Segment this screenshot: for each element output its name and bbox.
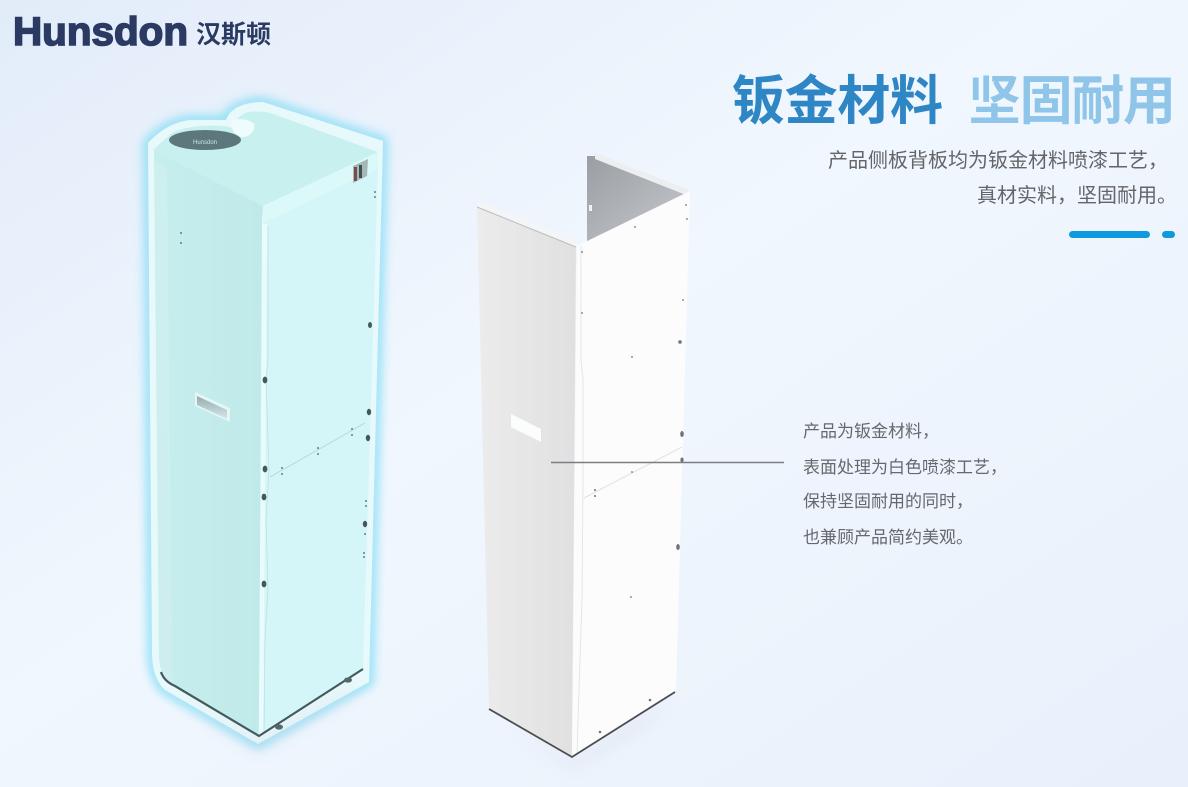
panel seam	[261, 224, 265, 736]
subtitle text: 真材实料，坚固耐用。	[977, 184, 1177, 207]
callout text: 也兼顾产品简约美观。	[803, 528, 973, 547]
title: 钣金材料	[732, 72, 943, 131]
seam dashes	[584, 447, 682, 498]
back top lip	[595, 153, 689, 195]
left side panel	[477, 206, 576, 757]
white outline	[148, 102, 383, 744]
panel seam	[577, 246, 583, 754]
title: 坚固耐用	[968, 72, 1176, 131]
base line	[161, 669, 363, 736]
holes	[581, 204, 688, 733]
left face inner strip	[155, 160, 172, 684]
handle slot	[195, 392, 230, 422]
left face	[154, 150, 263, 736]
mounting holes	[180, 191, 376, 587]
accent bars	[1069, 231, 1175, 238]
right face	[259, 168, 378, 736]
callout text: 保持坚固耐用的同时，	[803, 492, 973, 511]
side panel step	[158, 432, 172, 684]
left top lip	[477, 202, 578, 247]
inner back panel	[587, 156, 686, 243]
callout leader line	[551, 462, 784, 464]
inner slot	[589, 205, 592, 211]
title	[732, 72, 1176, 131]
control dial: Hunsdon	[193, 140, 217, 146]
front panel	[572, 191, 690, 757]
callout text: 产品为钣金材料，	[803, 422, 939, 441]
floor shadow	[170, 682, 362, 752]
glow halo	[148, 102, 383, 744]
lip shadow	[477, 207, 576, 247]
subtitle text	[828, 149, 1177, 207]
floor shadow	[495, 696, 676, 770]
lid front edge	[263, 152, 378, 223]
callout text: 表面处理为白色喷漆工艺，	[803, 458, 1007, 477]
logo: Hunsdon	[13, 10, 188, 54]
base line	[489, 692, 675, 757]
cut out	[511, 414, 541, 442]
control dial	[169, 130, 241, 150]
feet	[275, 677, 352, 730]
subtitle text: 产品侧板背板均为钣金材料喷漆工艺，	[828, 149, 1168, 172]
logo: 汉斯顿	[196, 21, 271, 49]
right product: sheet metal shell	[477, 153, 690, 770]
callout text	[803, 422, 1007, 547]
dial notch	[231, 119, 254, 137]
left product: glowing air unit	[148, 102, 383, 752]
top lid	[153, 112, 378, 206]
logo	[13, 10, 271, 54]
connector port	[353, 159, 368, 183]
